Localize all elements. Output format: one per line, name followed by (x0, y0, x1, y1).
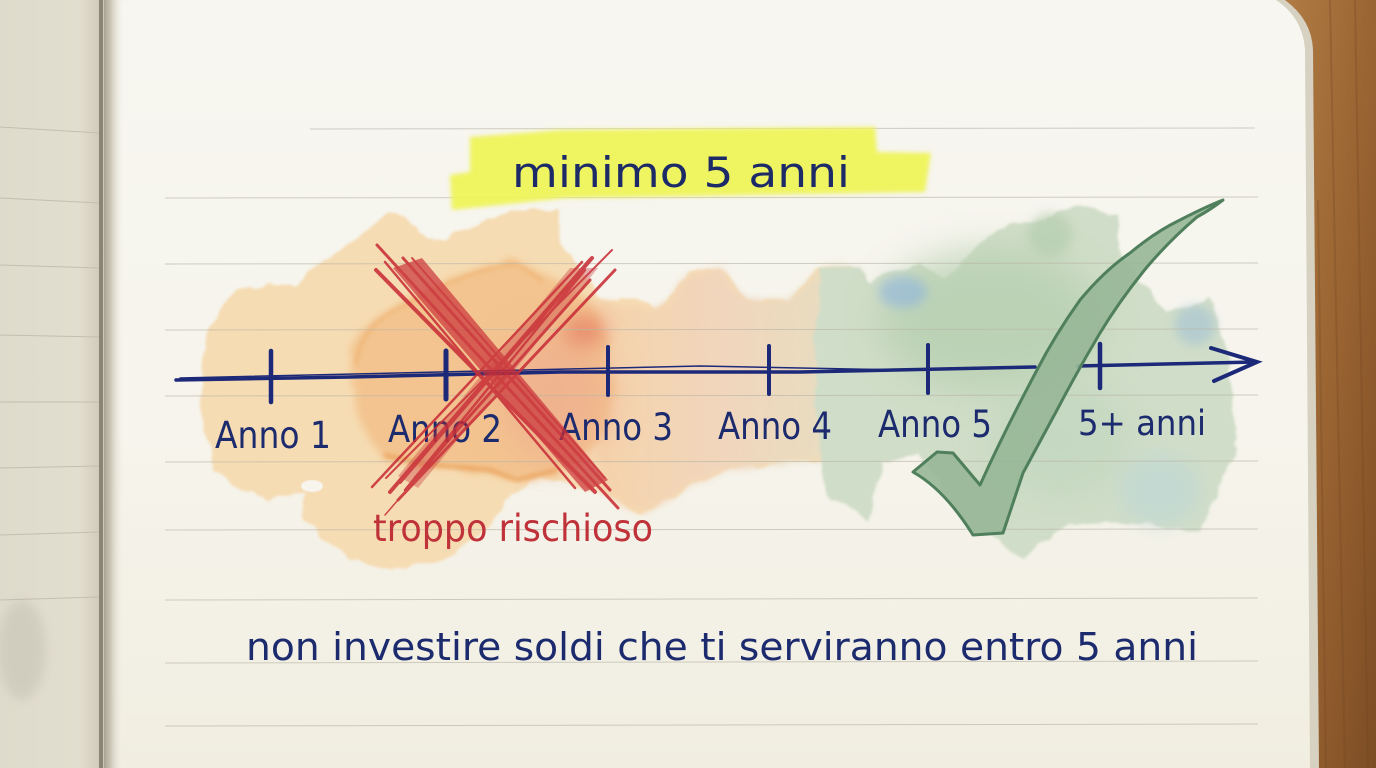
wash: pink-red blush (500, 330, 610, 460)
year labels: Anno 1 (215, 414, 331, 457)
year labels: Anno 4 (718, 405, 832, 448)
red X cross-out (372, 245, 618, 515)
timeline axis with ticks and arrow (176, 344, 1257, 402)
year labels: 5+ anni (1078, 404, 1206, 444)
wash: white gap (301, 480, 323, 492)
highlighter behind title (450, 127, 931, 210)
wash: saturated orange core (350, 260, 612, 480)
year labels (215, 403, 1206, 457)
year labels: Anno 2 (388, 408, 502, 451)
year labels: Anno 5 (878, 403, 992, 446)
ruled lines (165, 128, 1258, 726)
wash: green (815, 207, 1237, 560)
red label: troppo rischioso (373, 507, 653, 550)
year labels: Anno 3 (559, 406, 673, 449)
wash: pale orange (200, 210, 850, 570)
green check mark (913, 200, 1223, 535)
watercolor wash: orange to pink to green (200, 207, 1237, 570)
notebook left page (0, 0, 106, 768)
wash: peach middle (590, 267, 860, 517)
wooden table background (1285, 0, 1376, 768)
bottom note: non investire soldi che ti serviranno entro 5 anni (246, 625, 1198, 669)
title: minimo 5 anni (512, 148, 850, 197)
